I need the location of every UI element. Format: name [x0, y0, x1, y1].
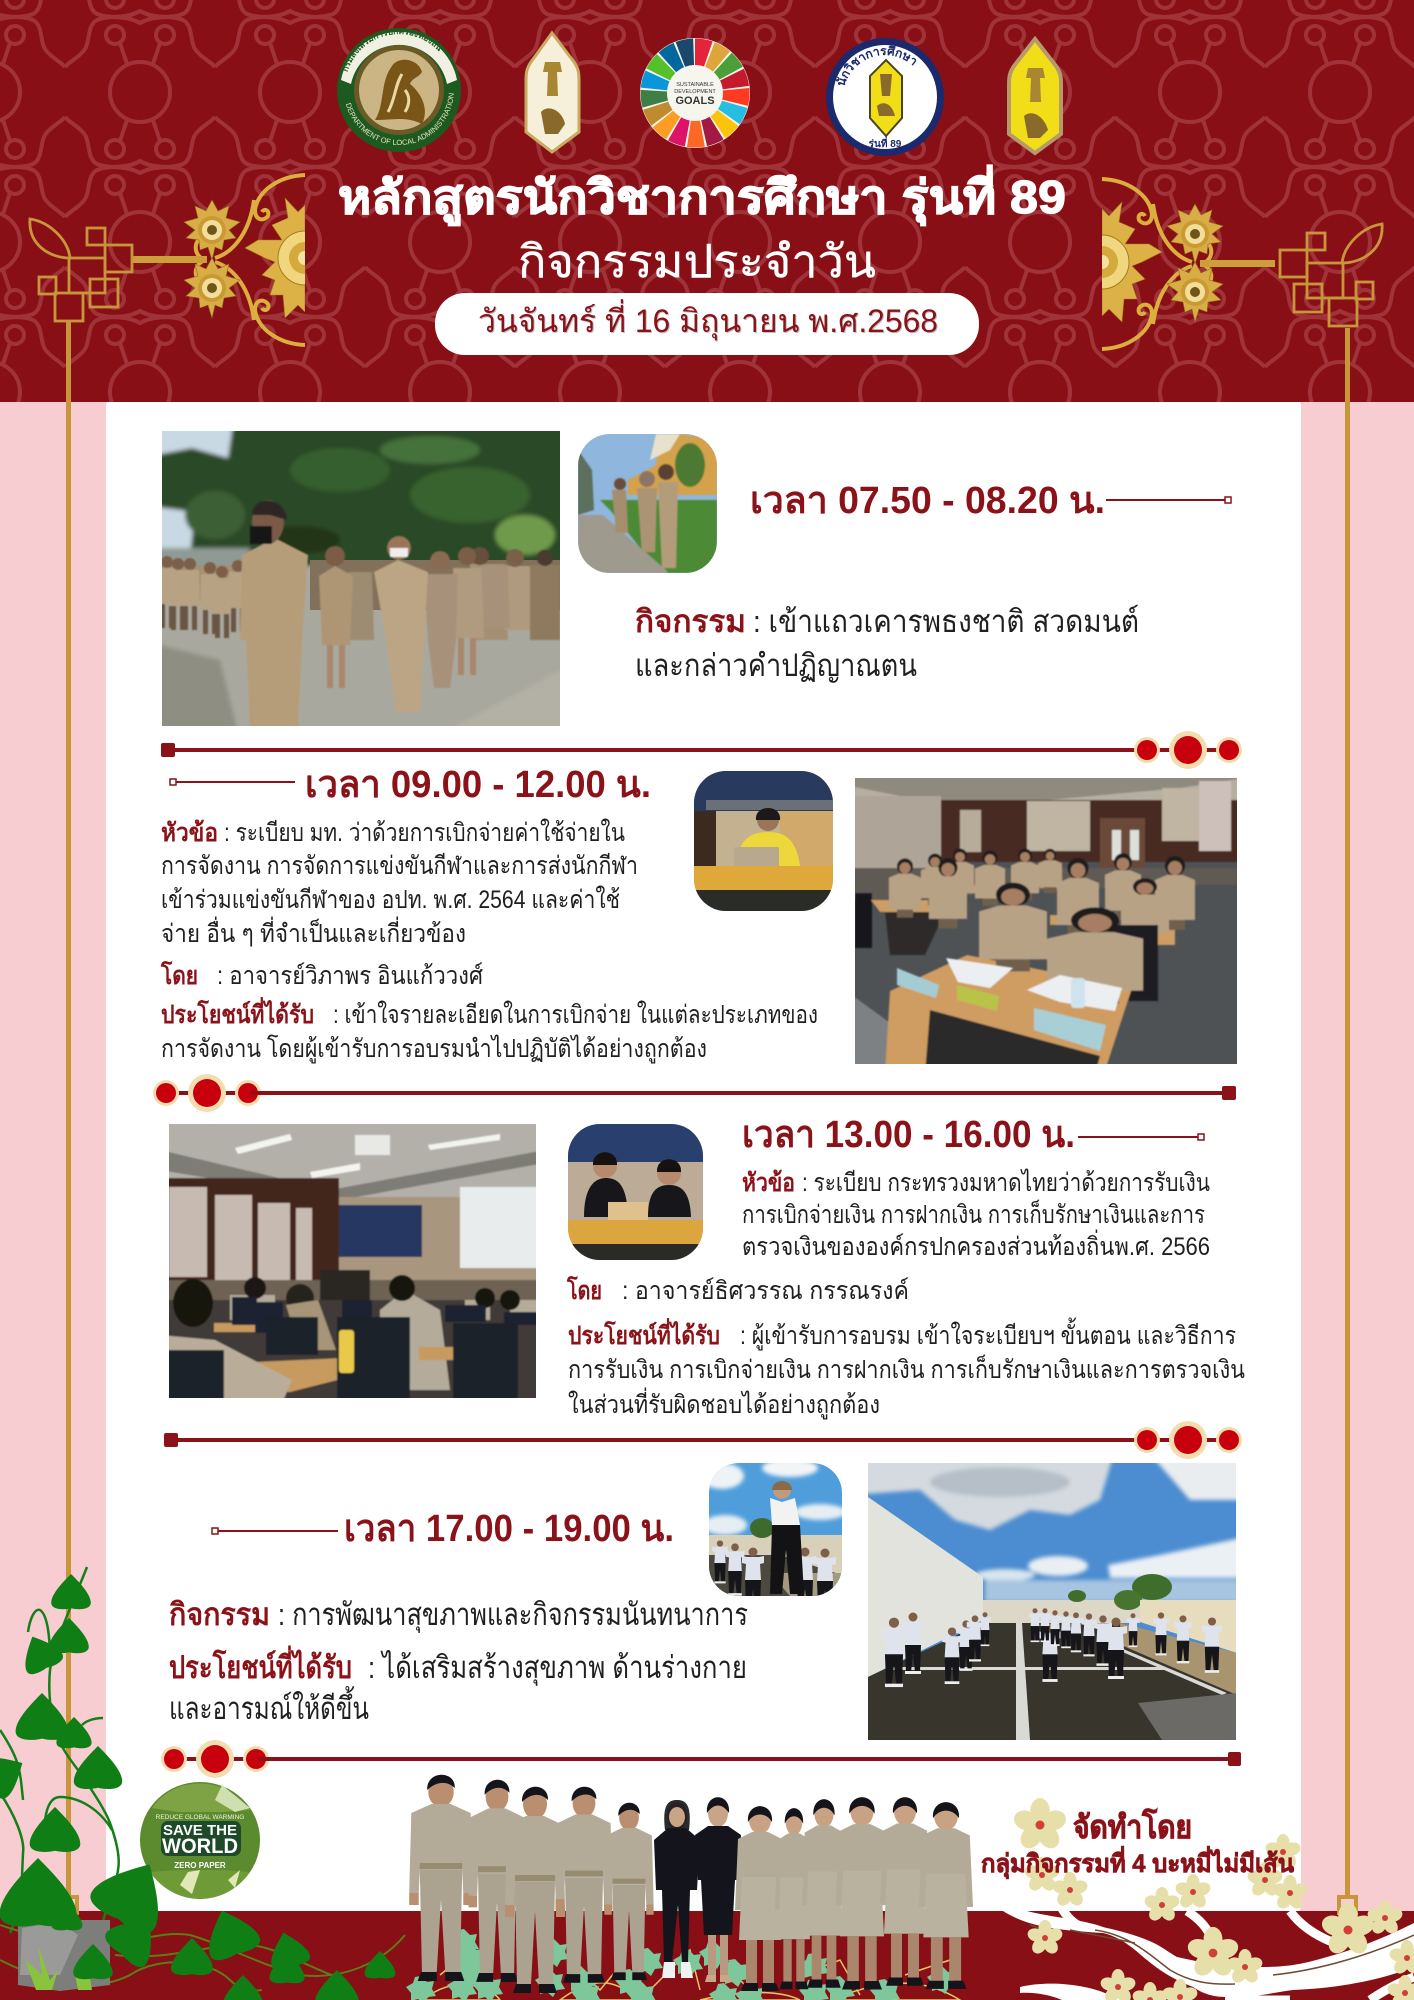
text: activity: : การพัฒนาสุขภาพและกิจกรรมนันทนาการ: [278, 1597, 748, 1634]
panel: lecture 13.00-16.00: [160, 1114, 1245, 1420]
icon: save the world zero paper badge: WORLD: [162, 1835, 238, 1858]
text: benefit: : ผู้เข้ารับการอบรม เข้าใจระเบียบฯ ขั้นตอน และวิธีการ: [740, 1317, 1236, 1351]
divider 2: [153, 1074, 1236, 1112]
text: benefit: การจัดงาน โดยผู้เข้ารับการอบรมนำไปปฏิบัติได้อย่างถูกต้อง: [161, 1034, 707, 1064]
text: activity: : เข้าแถวเคารพธงชาติ สวดมนต์: [753, 604, 1139, 639]
photo: rounded standing officers: [578, 434, 717, 573]
text: topic: การเบิกจ่ายเงิน การฝากเงิน การเก็บรักษาเงินและการ: [742, 1199, 1205, 1229]
subtitle: กิจกรรมประจำวัน: [518, 236, 876, 287]
text: activity: กิจกรรม: [169, 1597, 270, 1632]
credit: organised by: [981, 1808, 1294, 1880]
text: benefit: [568, 1317, 1245, 1420]
credit: organised by: จัดทำโดย: [1073, 1808, 1192, 1845]
photo: classroom seated officers: [855, 778, 1237, 1064]
text: topic: : ระเบียบ กระทรวงมหาดไทยว่าด้วยการรับเงิน: [802, 1168, 1210, 1197]
text: benefit: และอารมณ์ให้ดีขึ้น: [169, 1686, 369, 1726]
text: topic: [742, 1168, 1210, 1261]
text: activity: [635, 604, 1139, 683]
icon: cream shield emblem: [526, 33, 579, 152]
gold frame lines: [60, 321, 1356, 1913]
icon: sustainable development goals wheel: DEVELOPMENT: [674, 89, 716, 95]
text: benefit: การรับเงิน การเบิกจ่ายเงิน การฝากเงิน การเก็บรักษาเงินและการตรวจเงิน: [568, 1354, 1245, 1384]
text: benefit: : ได้เสริมสร้างสุขภาพ ด้านร่างกาย: [368, 1650, 747, 1687]
icon: save the world zero paper badge: ZERO PAPER: [174, 1861, 226, 1870]
text: topic: การจัดงาน การจัดการแข่งขันกีฬาและการส่งนักกีฬา: [161, 852, 638, 880]
panel: lecture 09.00-12.00: [160, 764, 1245, 1074]
time heading: [170, 764, 651, 806]
gold ornament left: [30, 175, 332, 345]
icon: department of local administration seal: DEPARTMENT OF LOCAL ADMINISTRATION: [346, 93, 454, 145]
icon: yellow shield emblem: [1009, 39, 1061, 153]
divider 3: [164, 1421, 1242, 1459]
text: topic: [161, 818, 638, 948]
text: benefit: [161, 997, 818, 1064]
gold ornament right: [1075, 179, 1382, 349]
text: benefit: ในส่วนที่รับผิดชอบได้อย่างถูกต้อง: [568, 1387, 880, 1420]
group photo of 13 members: [409, 1775, 973, 1993]
text: benefit: ประโยชน์ที่ได้รับ: [161, 997, 314, 1029]
text: topic: หัวข้อ: [742, 1169, 795, 1197]
divider 4: [161, 1740, 1241, 1778]
text: speaker: [160, 960, 483, 990]
top banner: [0, 0, 1414, 402]
white content panel: [106, 398, 1301, 1914]
text: speaker: โดย: [160, 960, 198, 990]
text: speaker: : อาจารย์วิภาพร อินแก้ววงศ์: [217, 962, 483, 990]
photo: lecture room from behind: [169, 1124, 536, 1398]
title: หลักสูตรนักวิชาการศึกษา รุ่นที่ 89: [338, 165, 1066, 226]
text: topic: หัวข้อ: [161, 819, 218, 847]
bottom band: [0, 1911, 1414, 2000]
icon: sustainable development goals wheel: [637, 35, 753, 151]
photo: instructor leading exercise: [709, 1463, 842, 1596]
icon: course emblem circle: นักวิชาการศึกษา: [836, 46, 916, 86]
date pill: วันจันทร์ ที่ 16 มิถุนายน พ.ศ.2568: [478, 299, 938, 341]
panel: exercise 17.00-19.00: [169, 1440, 1255, 1740]
time heading: เวลา 17.00 - 19.00 น.: [344, 1508, 674, 1550]
divider 1: [161, 731, 1242, 769]
icon: save the world zero paper badge: SAVE THE: [163, 1822, 237, 1839]
text: topic: จ่าย อื่น ๆ ที่จำเป็นและเกี่ยวข้อง: [161, 916, 466, 948]
icon: department of local administration seal: [337, 28, 461, 152]
panel: morning assembly 07.50-08.20: [162, 431, 1232, 726]
bottom leaves behind group: [406, 1929, 960, 2000]
text: speaker: โดย: [566, 1275, 602, 1305]
text: benefit: : เข้าใจรายละเอียดในการเบิกจ่าย ในแต่ละประเภทของ: [333, 1000, 818, 1029]
photo: group exercise on rooftop: [868, 1463, 1236, 1740]
time heading: เวลา 09.00 - 12.00 น.: [305, 764, 651, 806]
photo: two speakers: [568, 1124, 704, 1260]
date pill: [435, 293, 979, 355]
photo: speaker in yellow: [694, 771, 833, 911]
text: activity: กิจกรรม: [635, 604, 746, 639]
text: activity: และกล่าวคำปฏิญาณตน: [635, 648, 917, 683]
text: benefit: ประโยชน์ที่ได้รับ: [169, 1645, 352, 1685]
decoration: climbing vine and rock: [0, 1567, 405, 2000]
text: activity: [169, 1597, 748, 1634]
icon: department of local administration seal: กรมส่งเสริมการปกครองท้องถิ่น: [344, 28, 440, 72]
time heading: เวลา 07.50 - 08.20 น.: [750, 480, 1105, 522]
icon: save the world zero paper badge: [140, 1782, 260, 1899]
text: topic: : ระเบียบ มท. ว่าด้วยการเบิกจ่ายค่าใช้จ่ายใน: [224, 818, 625, 847]
text: topic: ตรวจเงินขององค์กรปกครองส่วนท้องถิ่นพ.ศ. 2566: [742, 1229, 1210, 1261]
icon: course emblem circle: รุ่นที่ 89: [869, 136, 902, 150]
text: topic: เข้าร่วมแข่งขันกีฬาของ อปท. พ.ศ. 2564 และค่าใช้: [161, 885, 620, 914]
icon: save the world zero paper badge: REDUCE GLOBAL WARMING: [156, 1814, 244, 1821]
text: benefit: ประโยชน์ที่ได้รับ: [568, 1318, 720, 1350]
time heading: เวลา 13.00 - 16.00 น.: [742, 1114, 1075, 1156]
icon: sustainable development goals wheel: SUSTAINABLE: [676, 82, 714, 88]
icon: course emblem circle: [826, 38, 944, 156]
time heading: [212, 1508, 674, 1550]
decoration: white branches and blossoms: [1003, 1798, 1414, 2000]
text: benefit: [169, 1645, 747, 1726]
photo: officers standing in line: [162, 431, 560, 726]
credit: organised by: กลุ่มกิจกรรมที่ 4 บะหมี่ไม่มีเส้น: [981, 1846, 1294, 1880]
text: speaker: : อาจารย์ธิศวรรณ กรรณรงค์: [622, 1277, 909, 1305]
icon: sustainable development goals wheel: GOALS: [675, 95, 715, 107]
